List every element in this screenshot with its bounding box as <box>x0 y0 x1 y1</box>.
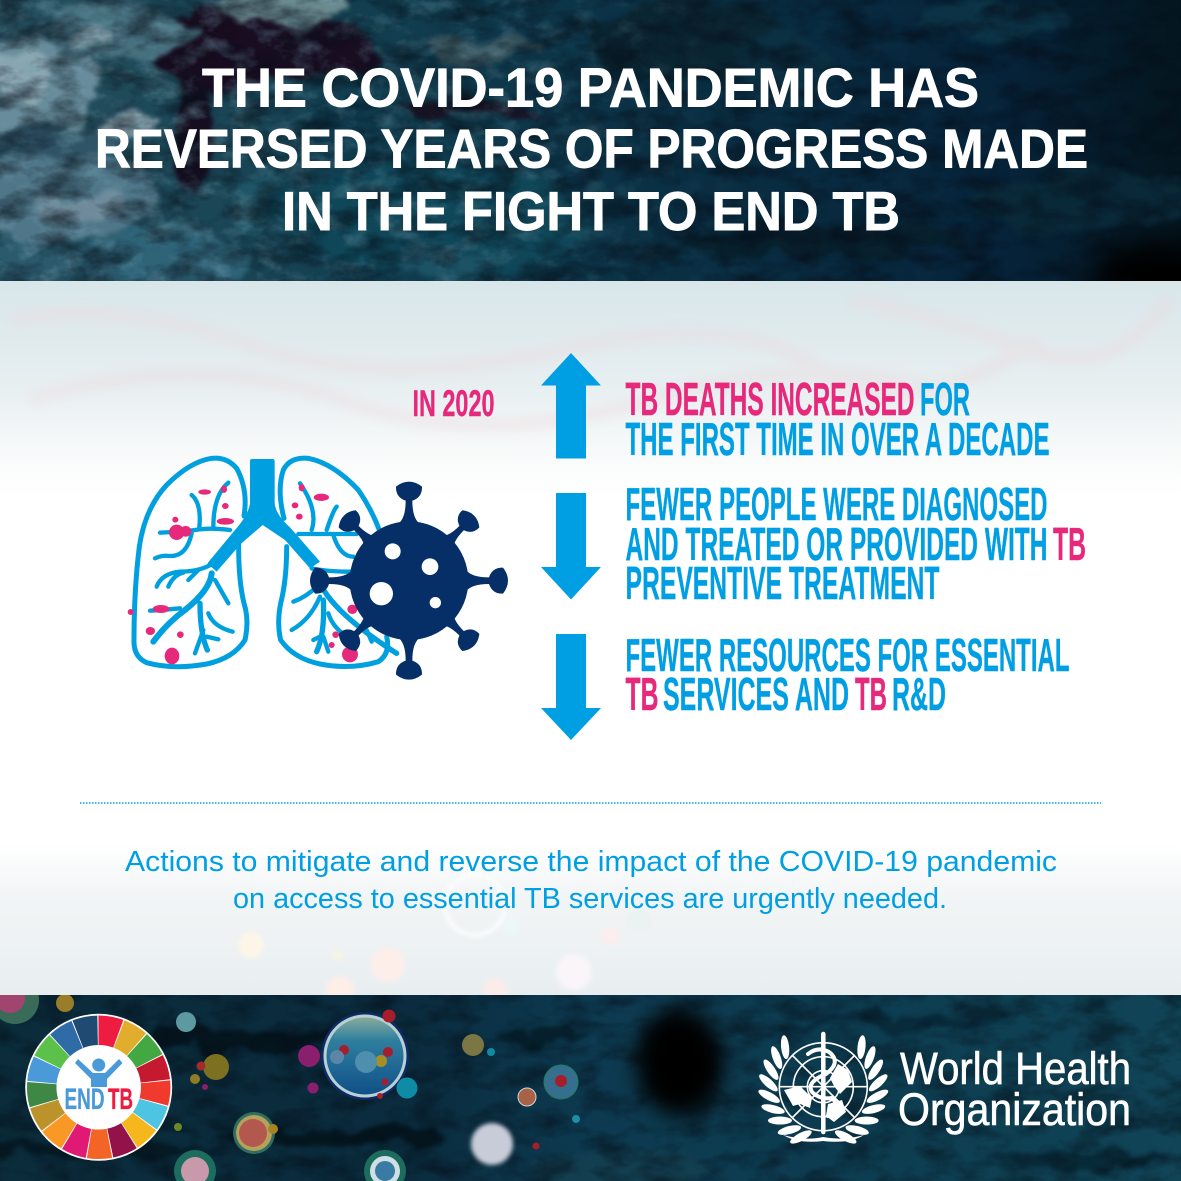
sub-element: decorative cells <box>0 976 580 1181</box>
icon: raised-arms person <box>75 1058 122 1087</box>
title: THE COVID-19 PANDEMIC HAS <box>202 56 979 118</box>
illustration: lungs with TB lesions and coronavirus <box>128 458 508 680</box>
icon: coronavirus <box>310 482 508 680</box>
text block: TB deaths increased: TB DEATHS INCREASED <box>626 373 914 425</box>
title: REVERSED YEARS OF PROGRESS MADE <box>95 118 1088 180</box>
title <box>95 56 1088 242</box>
text block: call to action: on access to essential TB services are urgently needed. <box>233 883 947 915</box>
logo: World Health Organization <box>757 1034 1131 1146</box>
arrow: up, TB deaths <box>541 353 601 458</box>
sub-element: WHO wordmark: World Health <box>900 1043 1131 1094</box>
sub-element: End TB wordmark: TB <box>108 1083 133 1116</box>
text block: fewer people diagnosed: TB <box>1053 518 1086 570</box>
panel: bottom textured banner <box>0 976 1181 1181</box>
panel: pale central background <box>0 281 1181 1004</box>
sub-element: End TB wordmark: END <box>64 1083 104 1116</box>
panel: top textured banner <box>0 0 1181 309</box>
text block: fewer resources: R&D <box>892 668 946 720</box>
title: IN THE FIGHT TO END TB <box>282 180 900 242</box>
sub-element: WHO wordmark: Organization <box>898 1084 1131 1135</box>
logo: End TB <box>18 1007 179 1168</box>
text block: fewer resources: TB <box>626 668 658 720</box>
text block: call to action: Actions to mitigate and reverse the impact of the COVID-19 pandemic <box>125 846 1057 878</box>
text block: fewer resources: SERVICES AND <box>663 668 849 720</box>
text block: fewer resources: TB <box>855 668 887 720</box>
arrow: down, people diagnosed <box>541 493 601 600</box>
sub-element: WHO wordmark <box>898 1043 1131 1135</box>
text block: fewer resources <box>626 629 1070 720</box>
text block: TB deaths increased: FOR <box>920 373 970 425</box>
icon: TB lesions <box>128 484 358 664</box>
text block: call to action <box>125 846 1057 915</box>
text block: TB deaths increased <box>626 373 1050 465</box>
label: in 2020: IN 2020 <box>412 383 494 424</box>
arrow: down, resources <box>541 634 601 740</box>
text block: fewer people diagnosed <box>626 478 1086 609</box>
icon: WHO emblem <box>757 1034 890 1146</box>
icon: lungs <box>134 458 397 667</box>
sub-element: coloured ring <box>18 1007 179 1168</box>
